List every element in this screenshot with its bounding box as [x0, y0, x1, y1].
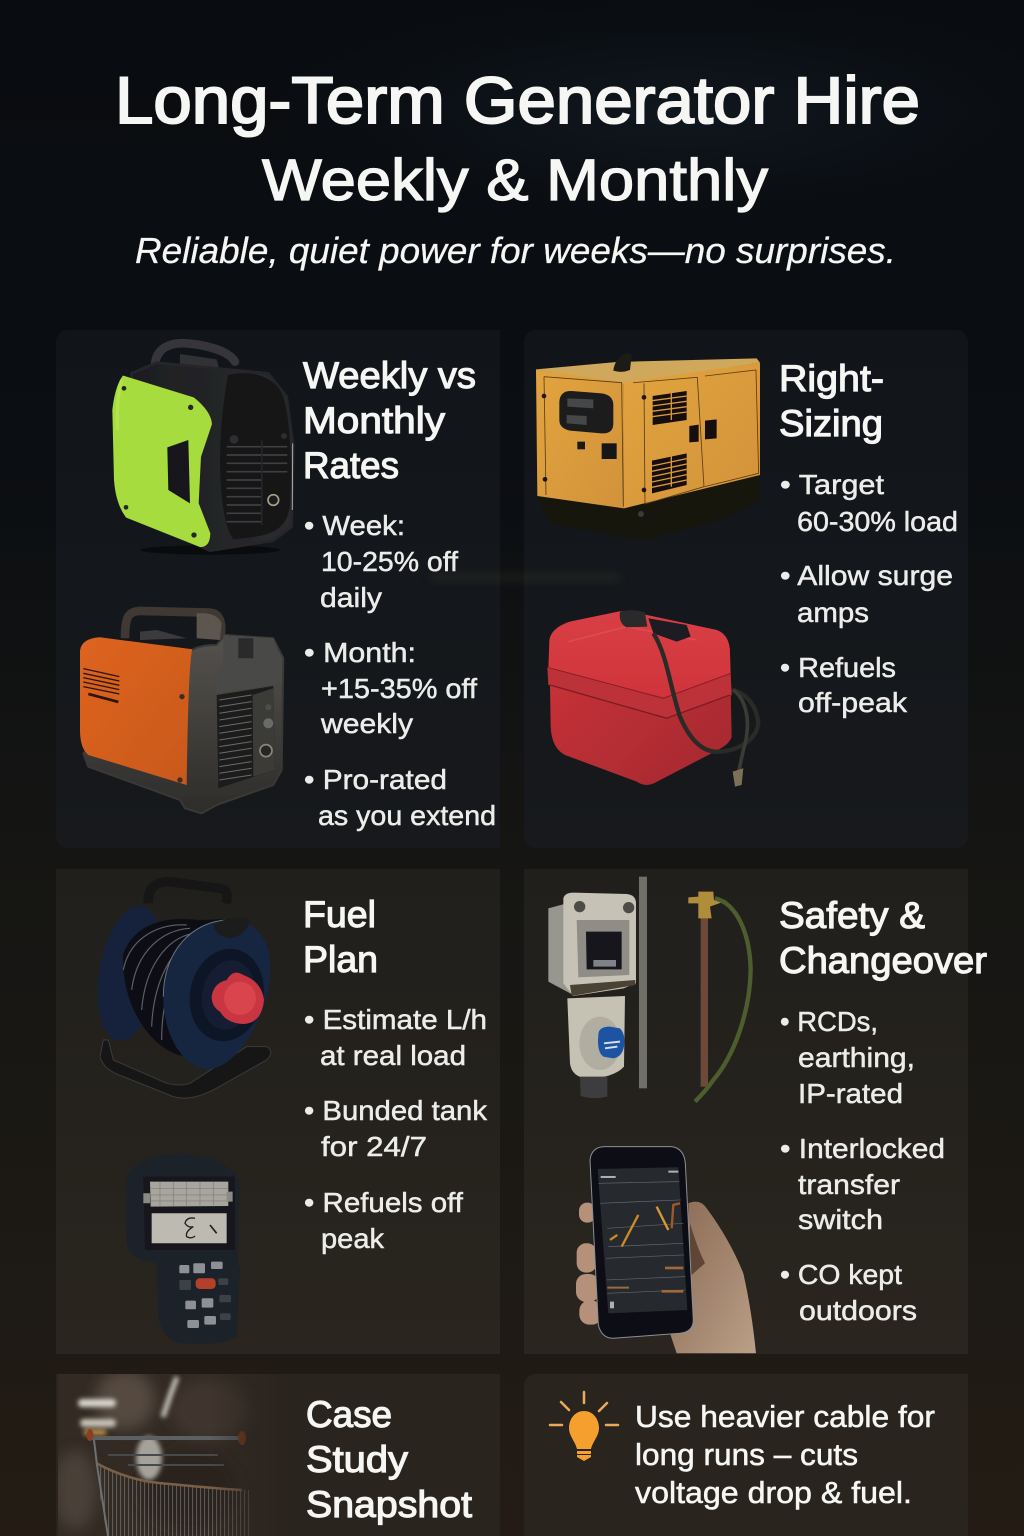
bullet list: • Week: [304, 510, 405, 541]
icon: cable reel [88, 882, 272, 1098]
panel: right-sizing [524, 330, 968, 848]
panel: safety and changeover [524, 869, 987, 1354]
bullet list: at real load [320, 1040, 466, 1071]
icon: orange inverter generator [80, 611, 283, 813]
bullet list: • Refuels [780, 652, 896, 683]
bullet list: IP-rated [798, 1078, 903, 1109]
heading: Monthly [303, 400, 446, 441]
bullet list: • Month: [304, 637, 416, 668]
icon: red fuel tank with cable [547, 610, 758, 787]
bullet list: +15-35% off [321, 673, 477, 704]
tagline: Reliable, quiet power for weeks—no surprises. [135, 230, 896, 271]
bullet list: 60-30% load [797, 506, 958, 537]
panel: fuel plan [56, 869, 500, 1354]
bullet list: amps [797, 597, 869, 628]
icon: hand holding phone with dashboard [576, 1147, 756, 1353]
icon: RCD socket unit [548, 877, 647, 1098]
icon: handheld meter [127, 1153, 240, 1344]
panel: weekly vs monthly rates [56, 330, 500, 848]
bullet list [780, 469, 958, 718]
heading [779, 895, 987, 981]
tip text: voltage drop & fuel. [635, 1475, 912, 1510]
bullet list: peak [321, 1223, 385, 1254]
bullet list: • Refuels off [304, 1187, 463, 1218]
bullet list: switch [798, 1204, 883, 1235]
image: shopping cart in aisle [58, 1374, 249, 1536]
bullet list: • Target [780, 469, 884, 500]
bullet list: • Bunded tank [304, 1095, 488, 1126]
icon: light bulb [550, 1392, 618, 1461]
heading: Study [306, 1439, 409, 1480]
heading: Snapshot [306, 1484, 473, 1525]
panel: cable tip [524, 1374, 968, 1536]
main title: Long-Term Generator Hire [115, 63, 920, 137]
heading: Changeover [779, 940, 987, 981]
title block [115, 63, 920, 271]
bullet list: • Pro-rated [304, 764, 447, 795]
heading: Case [306, 1394, 392, 1435]
heading: Right- [779, 358, 884, 399]
icon: yellow diesel generator [536, 353, 760, 540]
bullet list: daily [320, 582, 382, 613]
bullet list: outdoors [799, 1295, 917, 1326]
bullet list: weekly [320, 708, 413, 739]
heading [779, 358, 884, 444]
subtitle: Weekly & Monthly [262, 148, 768, 213]
icon: earth rod and green cable [688, 892, 751, 1102]
heading [303, 894, 378, 980]
heading: Sizing [779, 403, 883, 444]
tip text: long runs – cuts [635, 1437, 858, 1472]
icon: green inverter generator [113, 343, 293, 555]
heading: Fuel [303, 894, 376, 935]
bullet list: off-peak [798, 687, 908, 718]
bullet list [304, 510, 496, 831]
heading: Plan [303, 939, 378, 980]
bullet list: • CO kept [780, 1259, 902, 1290]
bullet list: • Estimate L/h [304, 1004, 487, 1035]
bullet list: 10-25% off [321, 546, 458, 577]
heading: Rates [303, 445, 399, 486]
heading [303, 355, 476, 486]
heading: Safety & [779, 895, 925, 936]
panel: case study snapshot [53, 1370, 500, 1536]
bullet list [304, 1004, 488, 1254]
heading: Weekly vs [303, 355, 476, 396]
bullet list [780, 1006, 945, 1326]
bullet list: transfer [798, 1169, 900, 1200]
heading [306, 1394, 473, 1525]
bullet list: as you extend [318, 800, 496, 831]
bullet list: • RCDs, [780, 1006, 878, 1037]
bullet list: earthing, [798, 1042, 915, 1073]
bullet list: • Interlocked [780, 1133, 945, 1164]
tip text: Use heavier cable for [635, 1399, 935, 1434]
bullet list: for 24/7 [321, 1131, 427, 1162]
bullet list: • Allow surge [780, 560, 953, 591]
tip text [635, 1399, 935, 1510]
